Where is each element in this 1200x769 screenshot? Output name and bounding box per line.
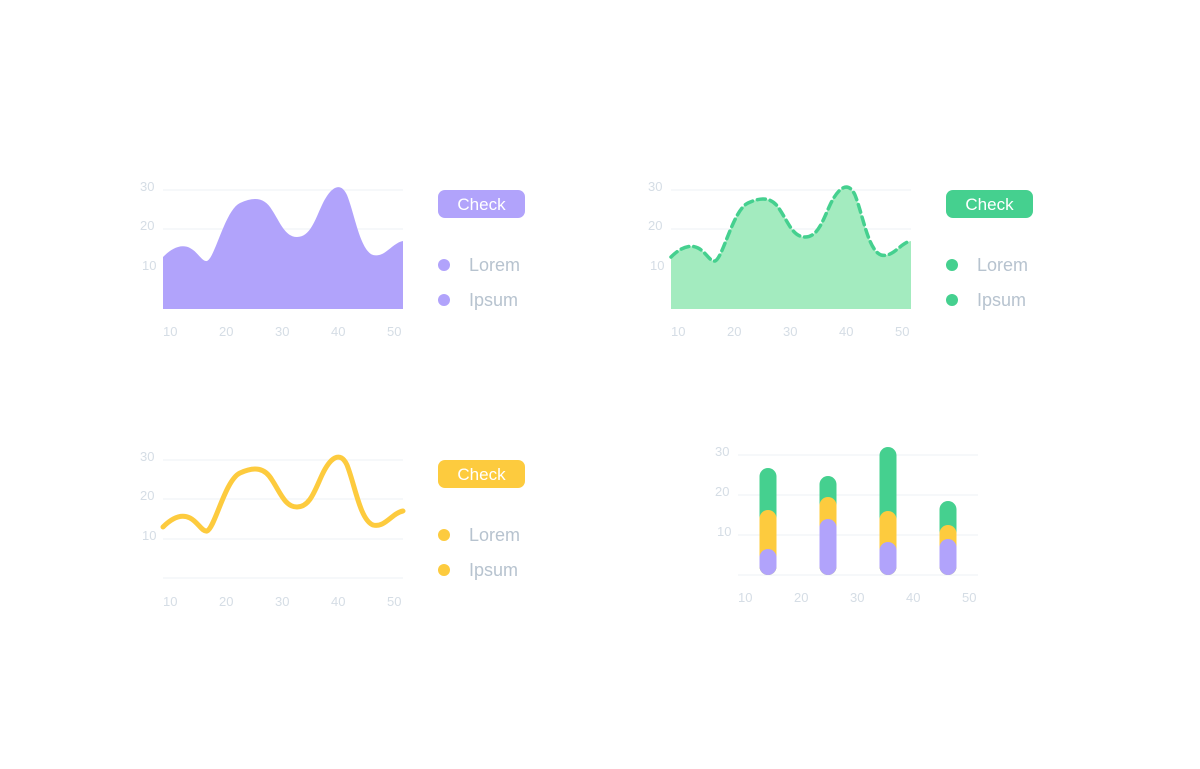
x axis labels yellow: 20	[219, 594, 233, 609]
legend purple	[438, 255, 520, 310]
panel: yellow line chart	[140, 449, 525, 609]
legend purple: Ipsum	[469, 290, 518, 310]
x axis labels bars	[738, 590, 976, 605]
y axis labels bars: 10	[717, 524, 731, 539]
legend green: Lorem	[977, 255, 1028, 275]
y axis labels green: 20	[648, 218, 662, 233]
button: check purple	[438, 190, 525, 218]
x axis labels purple: 10	[163, 324, 177, 339]
area purple	[163, 187, 403, 309]
y axis labels bars: 20	[715, 484, 729, 499]
y axis labels purple: 30	[140, 179, 154, 194]
x axis labels yellow	[163, 594, 401, 609]
x axis labels yellow: 50	[387, 594, 401, 609]
x axis labels bars: 10	[738, 590, 752, 605]
button: check green	[946, 190, 1033, 218]
x axis labels yellow: 30	[275, 594, 289, 609]
x axis labels bars: 30	[850, 590, 864, 605]
panel: green area chart	[648, 179, 1033, 339]
y axis labels purple: 10	[142, 258, 156, 273]
button: check yellow	[438, 460, 525, 488]
y axis labels green: 10	[650, 258, 664, 273]
bar 4	[940, 501, 956, 575]
x axis labels green	[671, 324, 909, 339]
button: check green: Check	[965, 195, 1014, 214]
x axis labels bars: 50	[962, 590, 976, 605]
legend yellow: Ipsum	[469, 560, 518, 580]
panel: purple area chart	[140, 179, 525, 339]
y axis labels bars	[715, 444, 731, 539]
x axis labels yellow: 10	[163, 594, 177, 609]
x axis labels bars: 40	[906, 590, 920, 605]
y axis labels yellow: 30	[140, 449, 154, 464]
legend yellow	[438, 525, 520, 580]
x axis labels green: 30	[783, 324, 797, 339]
y axis labels yellow: 10	[142, 528, 156, 543]
x axis labels purple	[163, 324, 401, 339]
legend yellow: Lorem	[469, 525, 520, 545]
x axis labels purple: 40	[331, 324, 345, 339]
bar 3	[880, 447, 896, 575]
y axis labels bars: 30	[715, 444, 729, 459]
line yellow	[163, 457, 403, 531]
y axis labels green	[648, 179, 664, 273]
x axis labels purple: 50	[387, 324, 401, 339]
x axis labels green: 20	[727, 324, 741, 339]
y axis labels purple	[140, 179, 156, 273]
legend green: Ipsum	[977, 290, 1026, 310]
x axis labels bars: 20	[794, 590, 808, 605]
x axis labels green: 10	[671, 324, 685, 339]
button: check purple: Check	[457, 195, 506, 214]
area green	[671, 187, 911, 309]
y axis labels yellow	[140, 449, 156, 543]
x axis labels green: 50	[895, 324, 909, 339]
bar 2	[820, 476, 836, 575]
dashed line green	[671, 187, 911, 261]
legend green	[946, 255, 1028, 310]
x axis labels purple: 30	[275, 324, 289, 339]
y axis labels yellow: 20	[140, 488, 154, 503]
panel: stacked bar chart	[715, 444, 978, 605]
x axis labels yellow: 40	[331, 594, 345, 609]
y axis labels green: 30	[648, 179, 662, 194]
button: check yellow: Check	[457, 465, 506, 484]
y axis labels purple: 20	[140, 218, 154, 233]
x axis labels green: 40	[839, 324, 853, 339]
x axis labels purple: 20	[219, 324, 233, 339]
legend purple: Lorem	[469, 255, 520, 275]
bar 1	[760, 468, 776, 575]
